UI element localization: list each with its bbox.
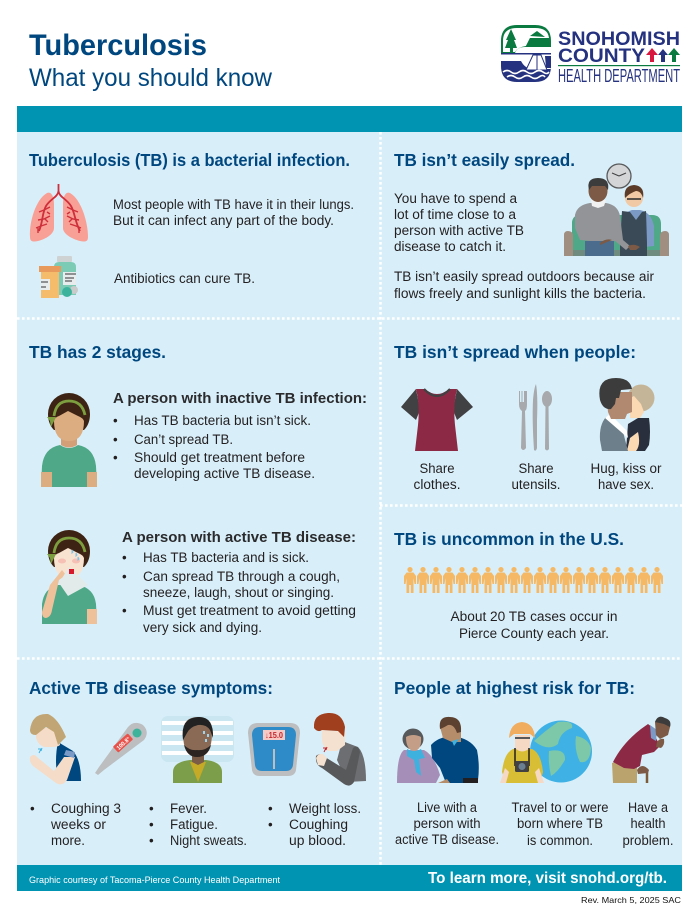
text: share clothes: clothes.: [414, 477, 460, 492]
text: active TB disease: •: [122, 550, 127, 565]
text: hug, kiss or have sex: [590, 461, 662, 492]
text: lungs: But it can infect any part of the body.: [113, 213, 334, 228]
illustration: person with active TB: [42, 530, 97, 624]
background panel: [17, 132, 682, 865]
text: health problem: [622, 800, 674, 848]
footer banner: To learn more, visit snohd.org/tb.: [428, 870, 667, 887]
text: live with a person: [395, 800, 499, 847]
text: outdoors: [394, 269, 655, 301]
text: active TB disease: Can spread TB through a cough,: [143, 569, 340, 584]
text: active TB disease: •: [122, 569, 127, 584]
text: inactive TB infection: •: [113, 432, 118, 447]
text: inactive TB infection: •: [113, 450, 118, 465]
illustration: two people on a sofa with clock: [564, 164, 669, 256]
text: live with a person: active TB disease.: [395, 832, 499, 847]
text: symptoms column 3: Weight loss.: [289, 801, 361, 816]
text: close contact: disease to catch it.: [394, 239, 506, 254]
text: hug, kiss or have sex: Hug, kiss or: [590, 461, 662, 476]
logo: Snohomish County Health Department: SNOHOMISH: [558, 29, 680, 50]
icon: scale: [248, 723, 300, 776]
panel: not spread when people: [394, 342, 662, 492]
text: active TB disease: very sick and dying.: [143, 620, 262, 635]
heading: TB isn’t easily spread.: [394, 150, 575, 170]
text: symptoms column 2: [149, 801, 247, 848]
text: symptoms column 2: •: [149, 817, 154, 832]
icon: thermometer: 100.8°: [116, 736, 132, 752]
text: inactive TB infection: Has TB bacteria but isn’t sick.: [134, 413, 311, 428]
text: inactive TB infection: A person with inactive TB infection:: [113, 390, 367, 407]
text: inactive TB infection: developing active TB disease.: [134, 466, 315, 481]
text: live with a person: Live with a: [417, 800, 478, 815]
text: health problem: Have a: [628, 800, 669, 815]
text: outdoors: flows freely and sunlight kills the bacteria.: [394, 286, 646, 301]
illustration: traveler and globe: [500, 720, 592, 783]
panel: not easily spread: [394, 150, 669, 301]
heading: Active TB disease symptoms:: [29, 678, 273, 698]
text: symptoms column 2: Fever.: [170, 801, 207, 816]
text: hug, kiss or have sex: have sex.: [598, 477, 654, 492]
logo: Snohomish County Health Department: COUNTY: [558, 46, 645, 67]
text: share utensils: Share: [518, 461, 554, 476]
revision note: Rev. March 5, 2025 SAC: [581, 895, 681, 905]
text: about 20 cases: Pierce County each year.: [459, 626, 609, 641]
illustration: older woman and man: [397, 717, 479, 783]
text: inactive TB infection: •: [113, 413, 118, 428]
text: symptoms column 2: Night sweats.: [170, 833, 247, 848]
text: active TB disease: [122, 529, 356, 635]
icon: scale: ↓15.0: [265, 731, 283, 740]
text: inactive TB infection: [113, 390, 367, 481]
text: travel: born where TB: [517, 816, 603, 831]
text: symptoms column 3: •: [268, 801, 273, 816]
text: travel: is common.: [527, 833, 593, 848]
title: [29, 29, 273, 92]
text: symptoms column 1: weeks or: [50, 817, 107, 832]
text: about 20 cases: About 20 TB cases occur in: [450, 609, 618, 624]
icon row: 20 people: [404, 567, 663, 593]
title: What you should know: [29, 64, 273, 92]
text: symptoms column 3: Coughing: [289, 817, 348, 832]
illustration: kiss: [599, 378, 654, 451]
title: Tuberculosis: [29, 29, 207, 62]
text: share utensils: [512, 461, 560, 492]
text: symptoms column 2: Fatigue.: [170, 817, 218, 832]
heading: TB has 2 stages.: [29, 342, 166, 362]
text: active TB disease: •: [122, 603, 127, 618]
heading: Tuberculosis (TB) is a bacterial infection.: [29, 150, 350, 170]
icon: utensils: [519, 384, 552, 451]
text: symptoms column 3: •: [268, 817, 273, 832]
panel: TB has 2 stages: [29, 342, 367, 635]
text: symptoms column 1: •: [30, 801, 35, 816]
heading: People at highest risk for TB:: [394, 678, 635, 698]
icon: lungs: [30, 184, 88, 242]
heading: TB is uncommon in the U.S.: [394, 529, 624, 549]
footer banner: [17, 865, 682, 891]
text: about 20 cases: [450, 609, 618, 641]
top banner: [17, 106, 682, 132]
text: outdoors: TB isn’t easily spread outdoors because air: [394, 269, 655, 284]
text: health problem: health: [630, 816, 666, 831]
logo: Snohomish County Health Department: [501, 25, 680, 86]
text: symptoms column 3: [268, 801, 361, 848]
text: inactive TB infection: Should get treatment before: [134, 450, 305, 465]
illustration: woman coughing: [30, 714, 81, 784]
illustration: man coughing blood: [314, 713, 366, 786]
text: share clothes: Share: [420, 461, 454, 476]
text: symptoms column 1: Coughing 3: [51, 801, 121, 816]
panel: bacterial infection: [29, 150, 354, 298]
text: close contact: person with active TB: [394, 223, 524, 238]
text: symptoms column 2: •: [149, 801, 154, 816]
text: symptoms column 1: [30, 801, 121, 848]
text: active TB disease: Must get treatment to avoid getting: [143, 603, 356, 618]
text: share utensils: utensils.: [512, 477, 560, 492]
text: close contact: [394, 191, 524, 254]
text: close contact: lot of time close to a: [394, 207, 517, 222]
text: symptoms column 2: •: [149, 833, 154, 848]
text: close contact: You have to spend a: [394, 191, 518, 206]
text: health problem: problem.: [622, 833, 674, 848]
text: symptoms column 3: up blood.: [289, 833, 346, 848]
text: active TB disease: Has TB bacteria and is sick.: [143, 550, 309, 565]
text: active TB disease: A person with active TB disease:: [122, 529, 356, 546]
icon: medicine bottles: [39, 256, 78, 298]
illustration: person with inactive TB: [41, 393, 97, 487]
text: share clothes: [414, 461, 460, 492]
footer banner: Graphic courtesy of Tacoma-Pierce County Health Department: [29, 875, 280, 886]
illustration: man with night sweats: [161, 716, 234, 783]
text: lungs: Most people with TB have it in their lungs.: [113, 197, 354, 212]
text: travel: Travel to or were: [512, 800, 608, 815]
text: active TB disease: sneeze, laugh, shout or singing.: [143, 585, 334, 600]
panel: symptoms: [29, 678, 366, 848]
panel: highest risk: [394, 678, 674, 848]
illustration: older man with cane: [612, 717, 670, 783]
text: live with a person: person with: [414, 816, 480, 831]
text: antibiotics: Antibiotics can cure TB.: [114, 271, 255, 286]
text: inactive TB infection: Can’t spread TB.: [134, 432, 233, 447]
text: travel: [512, 800, 608, 848]
icon: thermometer: [95, 723, 147, 775]
heading: TB isn’t spread when people:: [394, 342, 636, 362]
panel: uncommon in the U.S.: [394, 529, 663, 641]
text: symptoms column 1: more.: [51, 833, 85, 848]
text: lungs: [113, 197, 354, 228]
icon: shirt: [401, 389, 473, 451]
